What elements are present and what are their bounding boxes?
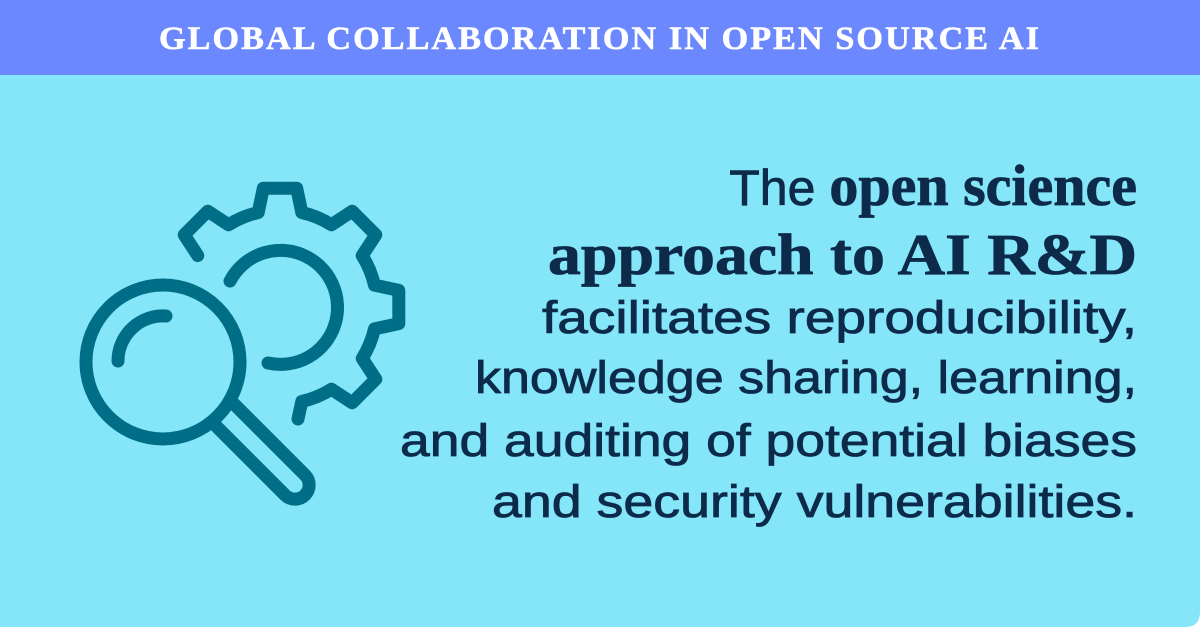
main text: and auditing of potential biases [400,415,1137,466]
gear inner arc [230,250,338,364]
main text: facilitates reproducibility, [542,292,1137,343]
main text: The open science [729,153,1137,218]
icon: magnifier and gear [86,188,399,499]
magnifier handle [214,404,309,499]
magnifier ring [86,285,240,439]
title: GLOBAL COLLABORATION IN OPEN SOURCE AI [159,21,1041,57]
main text: knowledge sharing, learning, [475,352,1137,403]
gear [181,188,399,419]
main text: approach to AI R&D [548,222,1137,287]
magnifier glint [118,316,166,361]
main text [400,153,1137,527]
header bar [0,0,1200,75]
main text: and security vulnerabilities. [492,476,1137,527]
